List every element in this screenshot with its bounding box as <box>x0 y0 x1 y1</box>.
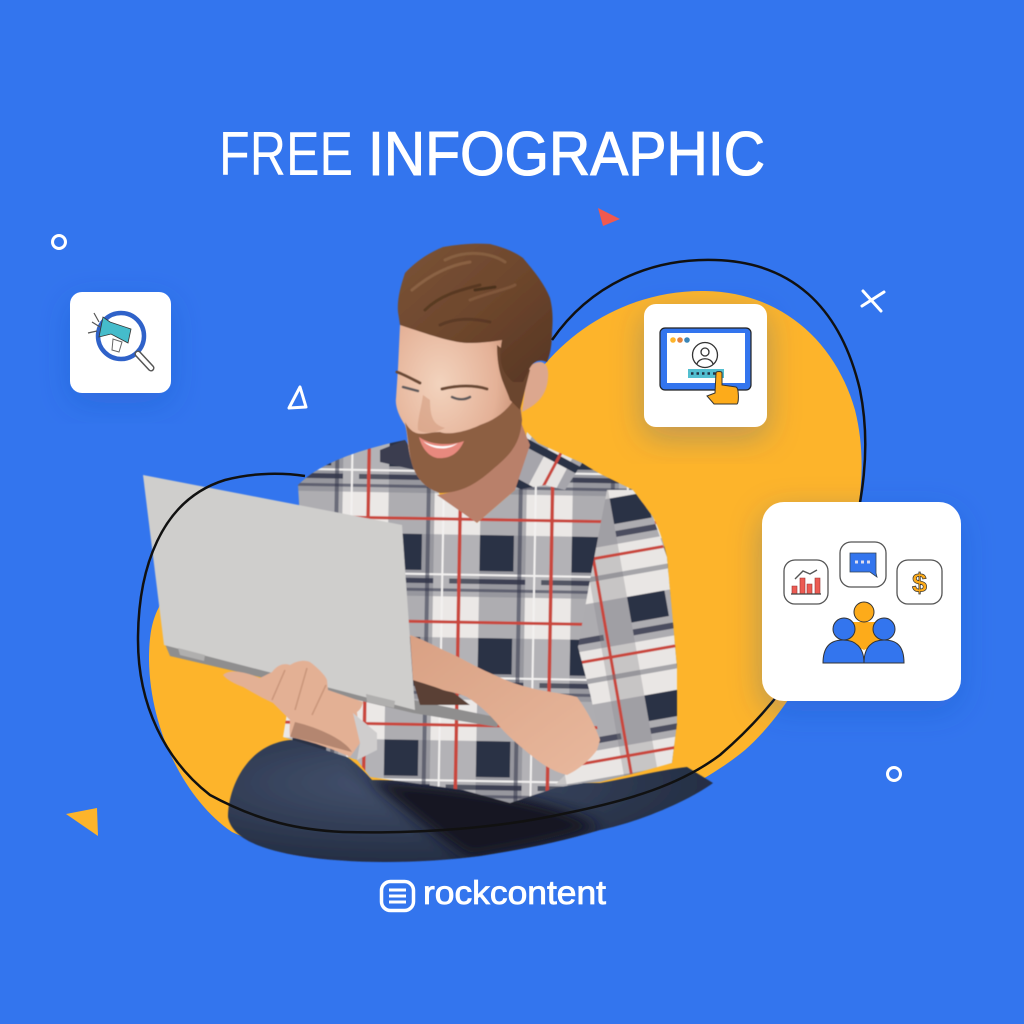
icon: dollar <box>897 560 942 604</box>
card: login <box>644 304 767 427</box>
icon: logo mark <box>382 882 414 910</box>
icon: chart <box>784 560 828 604</box>
dark gap behind hand <box>410 670 470 705</box>
collar <box>515 432 582 490</box>
sleeve <box>555 490 677 785</box>
card: megaphone search <box>70 292 171 393</box>
jeans <box>228 740 713 862</box>
laptop hinges <box>178 648 395 708</box>
icon: login screen <box>660 328 751 404</box>
title: FREE <box>219 120 353 189</box>
eyes and brows <box>397 372 487 399</box>
black outline curve <box>138 260 865 832</box>
left hand <box>223 661 363 757</box>
icon: team with chart, chat and dollar <box>784 542 942 663</box>
mouth <box>419 437 464 458</box>
decorative shapes <box>52 208 900 836</box>
face <box>396 325 522 493</box>
cuff <box>353 713 377 760</box>
icon: megaphone in magnifier <box>88 313 151 368</box>
laptop base <box>165 644 500 727</box>
icon: chat <box>840 542 886 587</box>
nose shadow <box>418 395 445 433</box>
neck <box>437 420 530 523</box>
icon: people <box>823 602 904 663</box>
yellow blob <box>149 291 862 854</box>
shirt <box>283 432 677 803</box>
logo: rockcontent <box>423 874 606 911</box>
ear <box>522 362 548 412</box>
title: INFOGRAPHIC <box>368 120 765 189</box>
laptop lid <box>143 475 415 710</box>
person <box>143 244 713 862</box>
forearm and hand <box>410 635 600 775</box>
hair <box>398 244 553 382</box>
icon: dollar: $ <box>912 568 927 598</box>
card: team <box>762 502 961 701</box>
title <box>219 120 765 189</box>
beard <box>405 392 522 493</box>
sideburn shading <box>497 345 530 410</box>
